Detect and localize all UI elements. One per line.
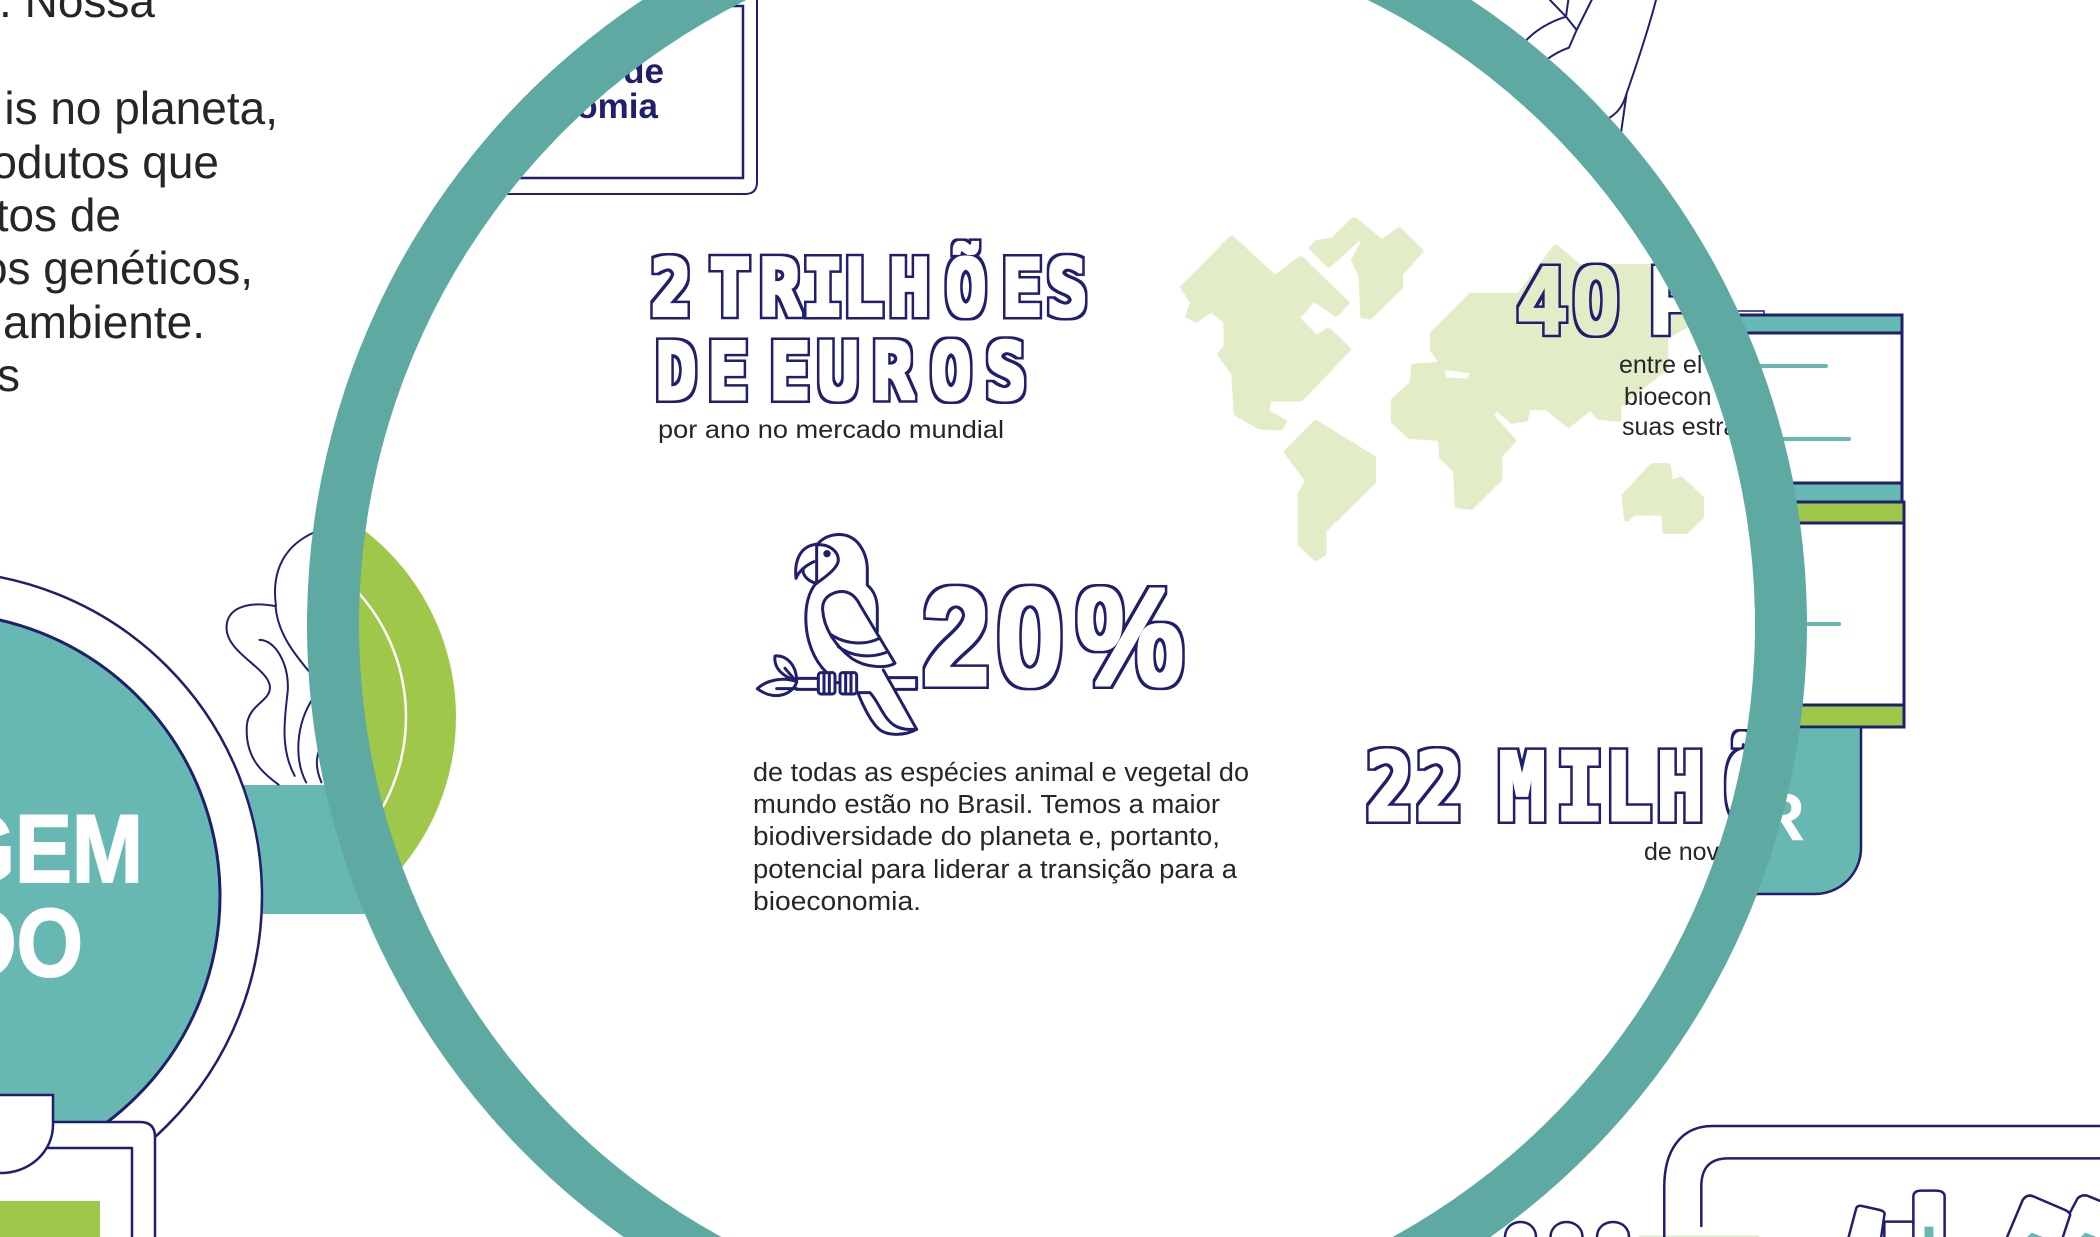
button label: R [1756, 779, 1805, 855]
icon: leaf outlines [227, 532, 321, 785]
icon: three rounded bumps [1505, 1222, 1629, 1237]
panel: bottom-right device [1505, 1126, 2100, 1237]
stat: 2 trilhões de euros [650, 243, 1088, 444]
panel: left circle badge [0, 571, 440, 1221]
text block: biodiversity paragraph: mundo estão no Brasil. Temos a maior [753, 791, 1221, 819]
upper book [1640, 315, 1902, 502]
stat caption: entre el [1619, 351, 1702, 379]
text block: intro paragraph cropped at left [0, 0, 278, 401]
text block: biodiversity paragraph [753, 759, 1249, 916]
magnifier interior white disc [357, 0, 1757, 1237]
panel: bottom-left card [0, 1095, 155, 1237]
stat caption: bioecon [1624, 383, 1712, 411]
world map [1183, 220, 1711, 559]
stat: 20%: 20% [922, 559, 1184, 714]
icon: parrot [757, 535, 917, 734]
icon: book shelf [1849, 1206, 1885, 1237]
text block: biodiversity paragraph: bioeconomia. [753, 888, 921, 916]
stat: 40 países: P [1649, 248, 1705, 353]
stat caption: por ano no mercado mundial [658, 416, 1004, 444]
text block: biodiversity paragraph: de todas as espécies animal e vegetal do [753, 759, 1249, 787]
text block: biodiversity paragraph: potencial para liderar a transição para a [753, 856, 1238, 884]
half-round label [0, 1095, 53, 1173]
card title: omia [576, 87, 659, 126]
badge heading [0, 795, 143, 997]
magnifier ring [307, 0, 1807, 1237]
outer circle [0, 571, 262, 1221]
icon: green circle [359, 531, 456, 867]
stat: 22 milhões: 22 MILHÕ [1366, 733, 1772, 842]
icon: branch lines top right [1523, 0, 1656, 140]
stat: 40 países [1516, 262, 1728, 435]
stat caption: suas estra [1622, 413, 1737, 441]
panel: top card [480, 0, 757, 194]
stat: 2 trilhões de euros: 2 TRILHÕES [650, 243, 1088, 334]
text block: intro paragraph cropped at left: ambiente. [3, 296, 205, 348]
card title [580, 64, 663, 118]
stat: 2 trilhões de euros: DE EUROS [655, 327, 1027, 418]
card title: de [623, 52, 664, 91]
teal circle [0, 613, 220, 1179]
stat caption: de novos [1644, 838, 1745, 866]
book lines [1700, 366, 1849, 624]
light green strip [1639, 1236, 1759, 1237]
book tab [1660, 311, 1764, 316]
lower book [1640, 502, 1904, 727]
green block [0, 1201, 100, 1237]
panel: magnifier content [0, 0, 1772, 953]
icon: stacked books [1640, 311, 1904, 727]
connector bar [220, 785, 440, 914]
text block: biodiversity paragraph: biodiversidade do planeta e, portanto, [753, 823, 1220, 851]
stat: 40 países: 40 [1519, 248, 1619, 353]
panel: teal button [1600, 727, 1861, 894]
text block: intro paragraph cropped at left: is no planeta, [4, 82, 278, 134]
stat caption [1620, 355, 1728, 435]
